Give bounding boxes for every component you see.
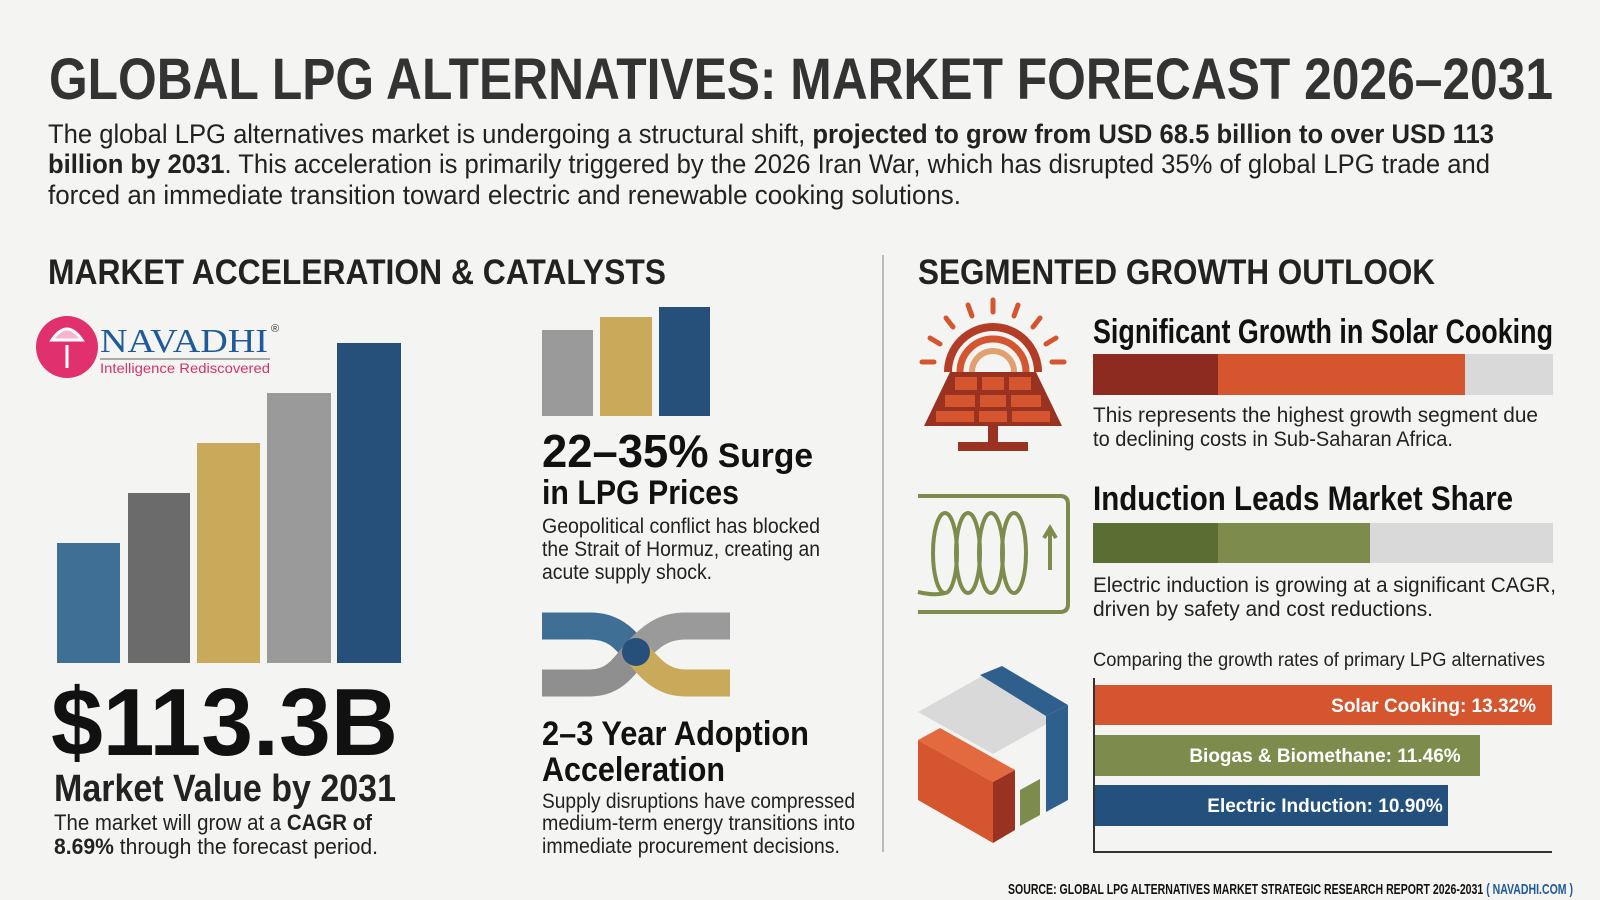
text: induction description — [1093, 574, 1556, 621]
stat description — [54, 810, 378, 859]
bar chart: growth rates: Solar Cooking: 13.32% — [1331, 696, 1536, 717]
bar chart: growth rates: Biogas & Biomethane: 11.46% — [1189, 746, 1461, 767]
text: price surge description: the Strait of Hormuz, creating an — [542, 538, 820, 561]
logo: navadhi: NAVADHI — [100, 323, 268, 360]
icon: cube — [918, 666, 1068, 843]
intro text: The global LPG alternatives market is undergoing a structural shift, projected to grow from USD 68.5 billion to over USD 113 — [48, 119, 1494, 149]
heading: price surge — [542, 425, 813, 512]
bar chart: market growth — [57, 343, 401, 663]
logo: navadhi: Intelligence Rediscovered — [100, 360, 270, 376]
intro text: billion by 2031. This acceleration is primarily triggered by the 2026 Iran War, which has disrupted 35% of global LPG trade and — [48, 149, 1490, 179]
text: solar description: This represents the highest growth segment due — [1093, 404, 1538, 427]
stat description: The market will grow at a CAGR of — [54, 810, 373, 835]
text: chart caption: Comparing the growth rates of primary LPG alternatives — [1093, 650, 1545, 671]
text: price surge description: acute supply shock. — [542, 561, 712, 584]
icon: price bars — [542, 307, 710, 416]
text: adoption description: immediate procurement decisions. — [542, 835, 840, 858]
text: induction description: driven by safety and cost reductions. — [1093, 598, 1433, 621]
icon: induction coil — [918, 496, 1068, 612]
heading: adoption acceleration: Acceleration — [542, 751, 725, 789]
heading: induction: Induction Leads Market Share — [1093, 480, 1513, 518]
heading: price surge: in LPG Prices — [542, 474, 739, 512]
heading: adoption acceleration — [542, 715, 809, 789]
intro text — [48, 119, 1494, 210]
icon: solar panel — [922, 300, 1064, 451]
text: adoption description: medium-term energy transitions into — [542, 812, 855, 835]
stat description: 8.69% through the forecast period. — [54, 834, 378, 859]
text: adoption description — [542, 790, 855, 858]
bar: induction progress — [1093, 523, 1553, 563]
big stat: $113.3B: $113.3B — [51, 669, 398, 776]
text: solar description: to declining costs in Sub-Saharan Africa. — [1093, 428, 1453, 451]
stat label: Market Value by 2031 — [54, 768, 396, 810]
intro text: forced an immediate transition toward electric and renewable cooking solutions. — [48, 180, 961, 210]
icon: crossing paths — [542, 626, 730, 683]
text: solar description — [1093, 404, 1538, 451]
heading: segmented growth: SEGMENTED GROWTH OUTLOOK — [918, 253, 1435, 292]
heading: adoption acceleration: 2–3 Year Adoption — [542, 715, 809, 753]
logo: navadhi: ® — [271, 323, 279, 335]
text: induction description: Electric induction is growing at a significant CAGR, — [1093, 574, 1556, 597]
text: price surge description: Geopolitical conflict has blocked — [542, 515, 820, 538]
bar chart: growth rates — [1094, 678, 1552, 853]
text: price surge description — [542, 515, 820, 584]
bar chart: growth rates: Electric Induction: 10.90% — [1207, 796, 1443, 817]
heading: market acceleration: MARKET ACCELERATION & CATALYSTS — [48, 253, 666, 292]
logo: navadhi — [36, 316, 279, 378]
heading: price surge: 22–35% Surge — [542, 425, 813, 477]
text: adoption description: Supply disruptions have compressed — [542, 790, 855, 813]
bar: solar progress — [1093, 354, 1553, 395]
